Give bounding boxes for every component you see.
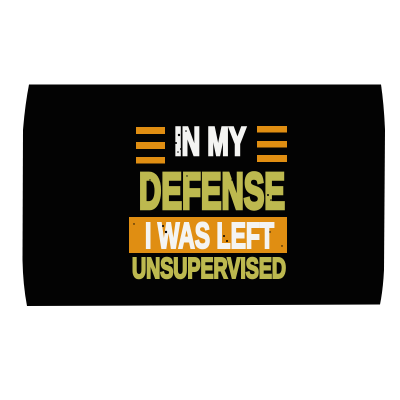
heading: defense: DEFENSE: [139, 162, 285, 220]
distress specks: [133, 130, 283, 247]
black towel: [22, 84, 385, 306]
orange banner: [129, 217, 287, 253]
heading: in my: IN MY: [174, 120, 246, 164]
left stripes: [136, 127, 165, 164]
right stripes: [257, 126, 287, 162]
banner text: i was left: I WAS LEFT: [145, 215, 274, 256]
heading: unsupervised: UNSUPERVISED: [132, 253, 286, 285]
